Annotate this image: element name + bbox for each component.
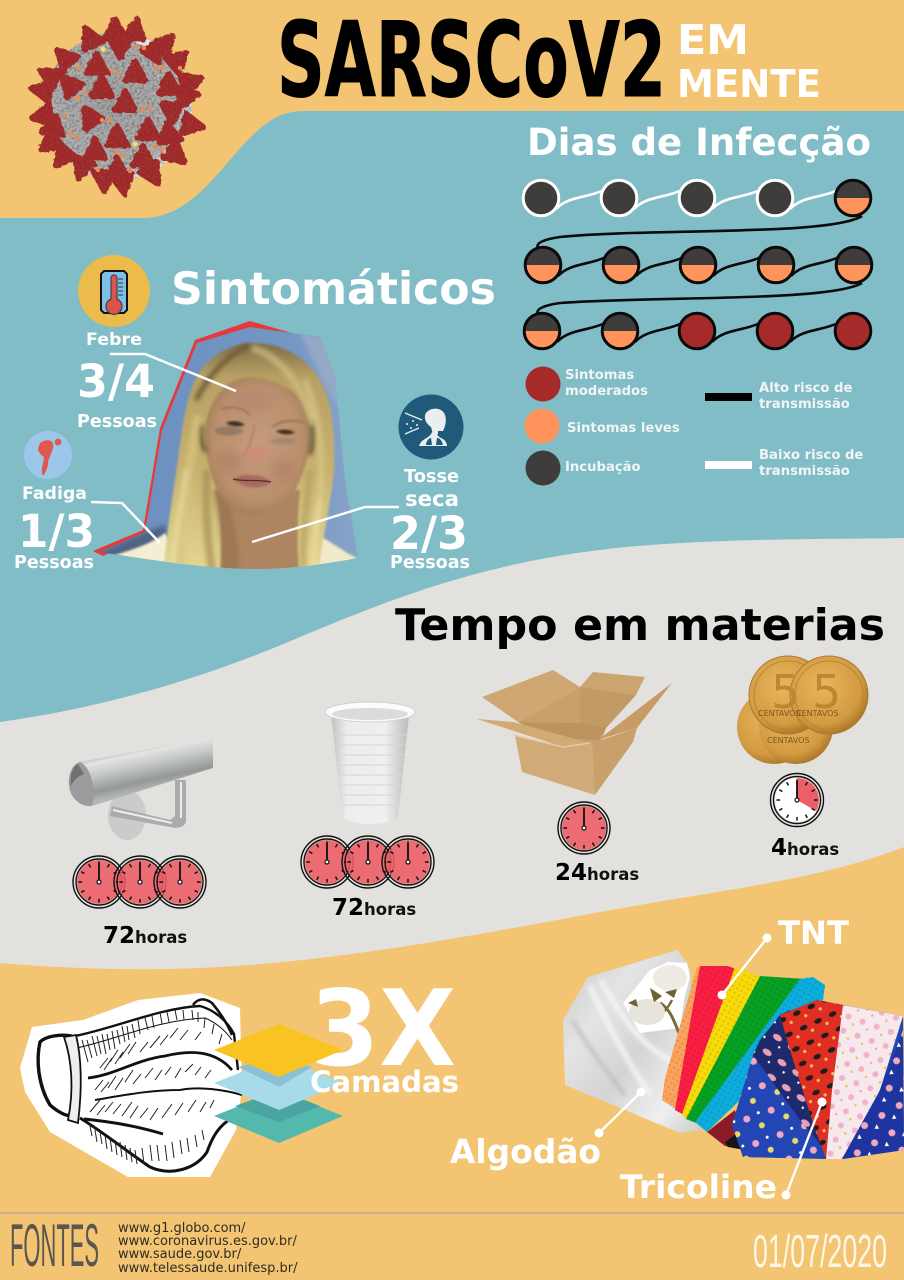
fabric: tricoline prints [707,1000,904,1159]
icon: cotton plant [623,962,690,1040]
material: coins: 5 [771,665,800,719]
label: coins 4 hours: 4horas [771,835,839,861]
footer: source links: www.g1.globo.com/ [118,1221,246,1236]
connectors: low transmission risk [556,190,838,209]
legend: transmissão [759,397,850,412]
symptom: fatigue: Fadiga [22,484,87,504]
heading: tempo em materias: Tempo em materias [395,600,885,651]
row 2 days [525,247,872,283]
footer: source links: www.coronavirus.es.gov.br/ [118,1234,297,1249]
portrait [90,320,370,575]
fabric: tnt rainbow [662,966,825,1132]
label: camadas: Camadas [310,1065,459,1099]
legend: Alto risco de [759,381,852,396]
symptom: fatigue: 1/3 [18,505,95,558]
big number: 3x: 3X [310,968,456,1090]
subtitle: em: EM [677,16,749,64]
callout line: fatigue [91,502,160,543]
infographic canvas: FONTES [10,1212,99,1279]
icon: thermometer [78,255,150,327]
portrait red outline [93,321,320,556]
icon: dry cough [398,394,464,460]
legend: Sintomas leves [567,421,680,436]
icon: coronavirus particle [29,17,205,196]
symptom: dry cough: Tosse [404,467,459,487]
icon: layers [214,1024,343,1143]
legend: Baixo risco de [759,448,863,463]
legend: Sintomas [565,368,634,383]
clock: coins [770,774,824,826]
material: coins: 5 [812,665,841,719]
clocks: cup [301,836,434,888]
symptom: fatigue: Pessoas [14,553,94,573]
icon: fatigue [24,431,72,479]
callout: tnt: TNT [778,914,849,952]
title: SARSCoV2 [277,1,666,121]
subtitle: mente: MENTE [677,62,821,106]
footer: source links [118,1221,298,1276]
symptom: fever: Pessoas [77,412,157,432]
legend [524,366,863,486]
symptom: dry cough: seca [405,487,459,511]
background: grey band [0,538,904,969]
callout line: fever [110,354,236,391]
fabric: cotton [563,950,702,1133]
legend: moderados [565,384,648,399]
symptom: dry cough [390,467,470,573]
callout: tricoline: Tricoline [620,1168,777,1206]
label: box 24 hours: 24horas [555,860,639,886]
material: plastic cup [325,702,415,824]
footer: source links: www.telessaude.unifesp.br/ [118,1261,298,1276]
callout: algodao [450,1088,646,1171]
symptom: fever [77,330,157,432]
symptom: fever: 3/4 [77,355,155,408]
material: coins: CENTAVOS [767,736,810,745]
footer rule [0,1212,904,1214]
row 1 days [523,180,871,216]
symptom: fever: Febre [86,330,142,350]
label: cup 72 hours: 72horas [332,895,416,921]
clocks: handrail [73,856,206,908]
connectors: high transmission risk [537,216,862,342]
material: coins: CENTAVOS [796,709,839,718]
symptom: dry cough: 2/3 [390,507,468,560]
label: handrail 72 hours: 72horas [103,923,187,949]
hair streaks [172,345,321,570]
background: teal band [0,111,904,760]
material: coins: CENTAVOS [758,709,801,718]
heading: dias de infeccao: Dias de Infecção [527,121,871,164]
row 3 days [524,313,871,349]
material: cardboard box [477,670,672,795]
material: coins [737,656,868,764]
legend: transmissão [759,464,850,479]
callout: algodao: Algodão [450,1132,601,1171]
callout: tricoline [620,1098,826,1206]
footer: source links: www.saude.gov.br/ [118,1247,242,1262]
chart: infection day chain [523,180,872,349]
callout: tnt [718,914,849,1000]
symptom: fatigue [14,484,95,573]
face details [240,398,266,408]
callout line: cough [252,507,399,542]
material: steel handrail [69,737,213,840]
face mask illustration [20,993,242,1177]
symptom: dry cough: Pessoas [390,553,470,573]
clock: box [558,802,610,854]
heading: sintomaticos: Sintomáticos [171,264,496,315]
legend: Incubação [565,460,641,475]
